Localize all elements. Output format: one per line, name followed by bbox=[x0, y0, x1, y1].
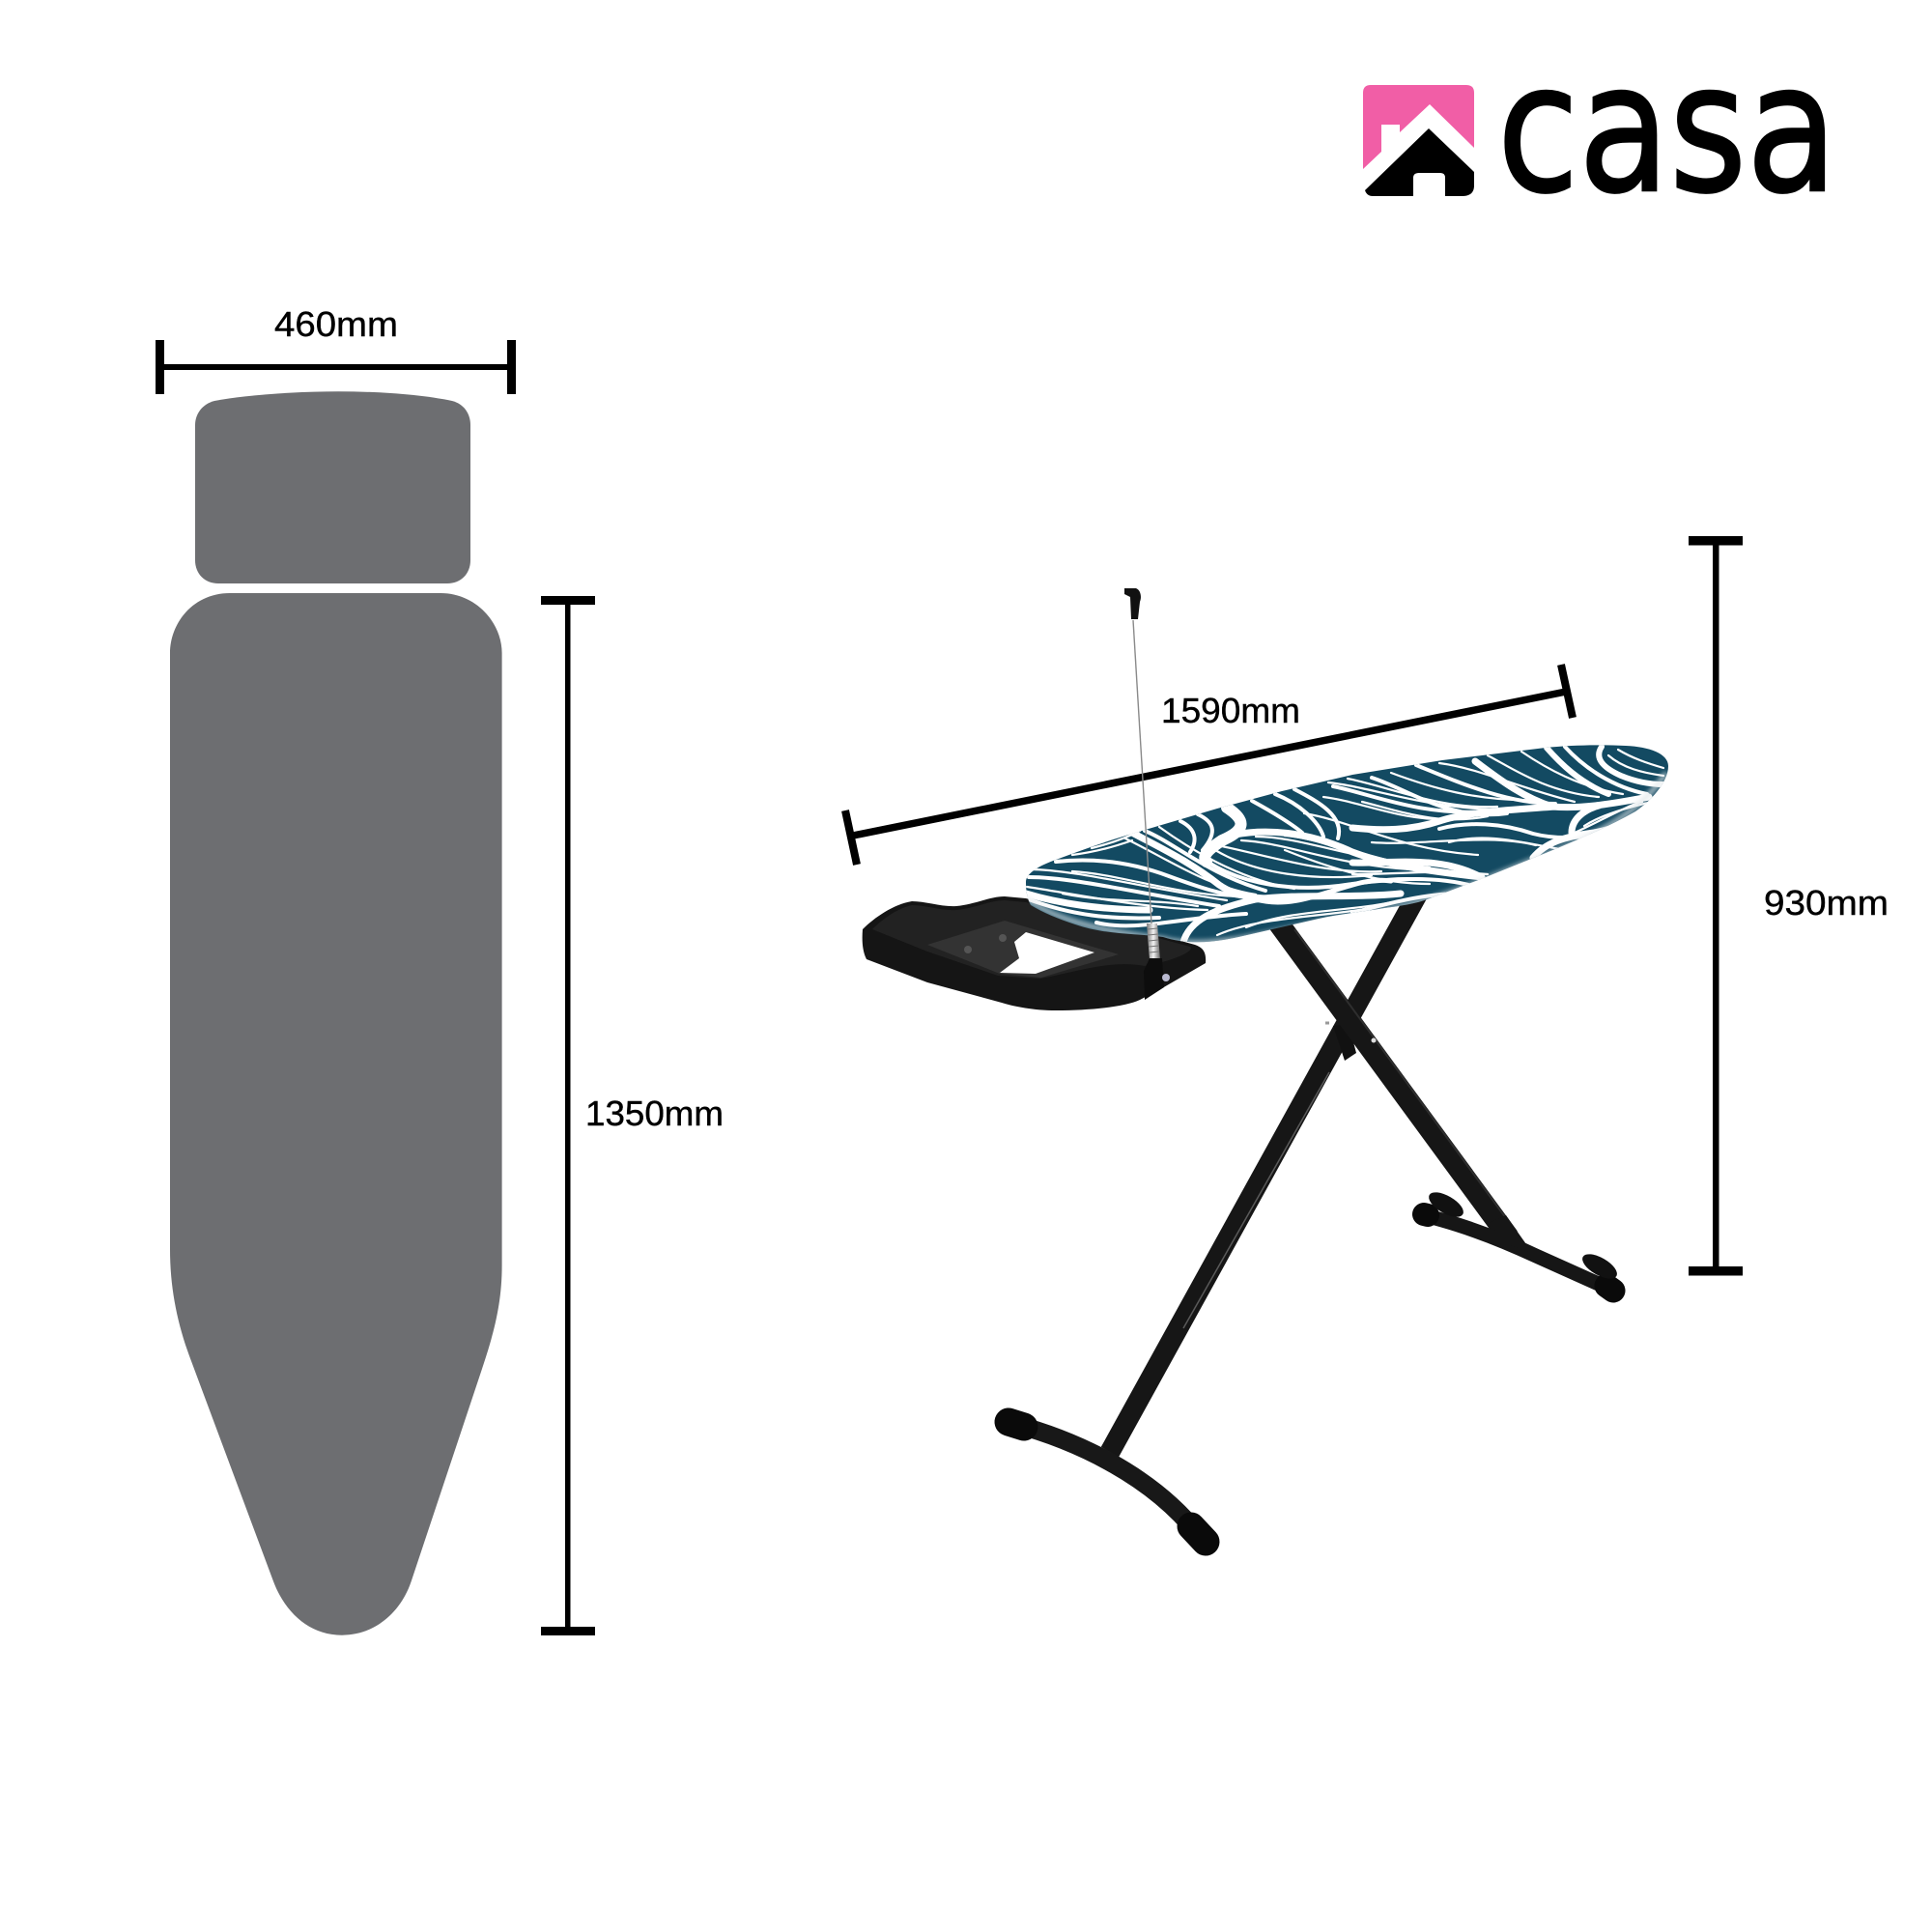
logo wordmark: casa bbox=[1497, 26, 1837, 233]
medium strands bbox=[1026, 747, 1647, 925]
label: 930mm: 930mm bbox=[1764, 883, 1889, 923]
thin strands bbox=[1027, 750, 1663, 935]
label: 460mm: 460mm bbox=[274, 304, 398, 344]
illustration: ironing board product bbox=[1009, 872, 1621, 1542]
front leg bbox=[1009, 872, 1430, 1542]
logo icon: black house bbox=[1365, 128, 1474, 196]
dimension: 1590mm diagonal bbox=[845, 665, 1573, 865]
board cover with wave pattern bbox=[1026, 745, 1668, 943]
dimension: 1350mm length bbox=[541, 596, 724, 1635]
board rim shading bbox=[1026, 773, 1666, 943]
iron rest opening bbox=[1000, 932, 1094, 974]
spring bbox=[1147, 923, 1160, 959]
dimension: 460mm width bbox=[156, 304, 516, 394]
dimension: 930mm height bbox=[1689, 536, 1889, 1275]
logo icon: pink square with roof cut-out bbox=[1363, 85, 1474, 169]
iron rest tray bbox=[863, 896, 1206, 1010]
silhouette: iron rest pad bbox=[195, 391, 470, 583]
label: 1590mm: 1590mm bbox=[1161, 691, 1300, 730]
thick white bands bbox=[1026, 747, 1663, 947]
support wire with hook and spring bbox=[1124, 588, 1170, 1000]
logo: casa bbox=[1363, 26, 1837, 233]
hook bbox=[1124, 588, 1141, 619]
wire bbox=[1133, 620, 1151, 923]
panel: ironing board top-view silhouette bbox=[170, 391, 502, 1635]
front foot bbox=[1014, 1424, 1198, 1534]
label: 1350mm: 1350mm bbox=[585, 1094, 724, 1133]
rear foot bbox=[1428, 1216, 1611, 1290]
rear leg bbox=[1267, 908, 1621, 1291]
bracket and bolt bbox=[1144, 958, 1170, 1000]
silhouette: board body bbox=[170, 593, 502, 1635]
